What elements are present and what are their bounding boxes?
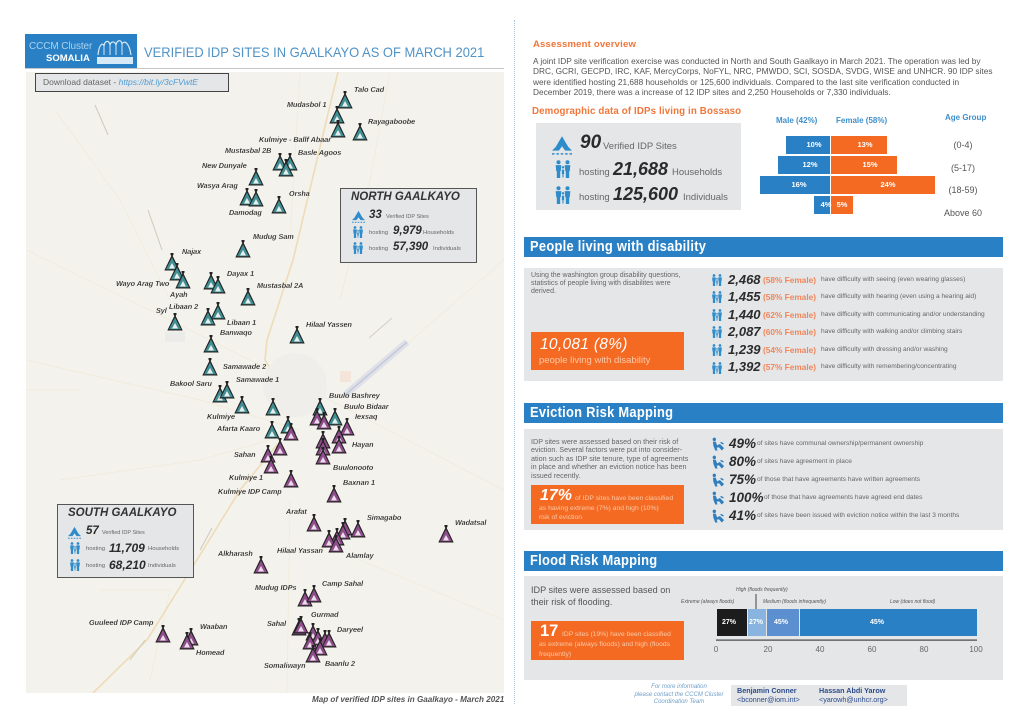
panel: south Gaalkayo: [57, 504, 194, 578]
site name labels: Samawade 2: [223, 362, 266, 371]
disability statistics: [712, 272, 985, 374]
site name labels: Guuleed IDP Camp: [89, 618, 154, 627]
footer: contact note: please contact the CCCM Cluster: [634, 692, 724, 698]
overview text: were identified hosting 21,688 households or 125,600 individuals. Compared to the last site verification conducted in: [533, 77, 959, 87]
panel: south Gaalkayo: Verified IDP Sites: [102, 530, 145, 536]
site name labels: Wasya Arag: [197, 181, 238, 190]
flood risk stacked bar chart: Extreme (always floods): [681, 599, 735, 605]
callout: disability total: people living with disability: [539, 355, 650, 366]
icon: tent: [68, 527, 81, 539]
disability statistics: (62% Female): [763, 310, 816, 320]
eviction intro text: issued recently.: [531, 471, 580, 480]
site name labels: Banwaqo: [220, 328, 253, 337]
site name labels: Afarta Kaaro: [216, 424, 261, 433]
panel: south Gaalkayo: 11,709: [109, 541, 145, 555]
footer: contacts: Hassan Abdi Yarow: [819, 686, 885, 695]
heading: assessment overview: Assessment overview: [533, 39, 636, 50]
eviction statistics: 75%: [729, 472, 756, 487]
section bar: disability: People living with disability: [530, 239, 706, 255]
panel: totals: Households: [672, 167, 722, 178]
eviction intro text: IDP sites were assessed based on their risk of: [531, 437, 678, 446]
site name labels: Buulonooto: [333, 463, 374, 472]
site name labels: Daryeel: [337, 625, 364, 634]
flood risk stacked bar chart: 45%: [870, 619, 885, 626]
footer: contacts: [731, 685, 907, 706]
site name labels: Mudasbol 1: [287, 100, 327, 109]
section bar: flood: Flood Risk Mapping: [530, 553, 657, 569]
panel: north Gaalkayo: 9,979: [393, 225, 422, 237]
site name labels: Mustasbal 2B: [225, 146, 271, 155]
panel: north Gaalkayo: hosting: [369, 246, 388, 252]
eviction statistics: of sites have communal ownership/permanent ownership: [757, 440, 923, 447]
site name labels: Arafat: [285, 507, 307, 516]
icon: people: [70, 542, 80, 554]
site name labels: Alkharash: [217, 549, 253, 558]
site name labels: Syl: [156, 306, 168, 315]
airport and town: [345, 342, 407, 395]
population pyramid chart: (5-17): [951, 163, 975, 173]
panel: flood: [524, 576, 1003, 680]
north site markers: [164, 91, 368, 438]
overview text: December 2019, there was a increase of 12 IDP sites and 2,250 Households or 7,330 individuals.: [533, 87, 891, 97]
overview text: [533, 56, 992, 97]
panel: north Gaalkayo: 33: [369, 209, 382, 221]
footer: contacts: Benjamin Conner: [737, 686, 797, 695]
eviction statistics: [712, 436, 959, 523]
panel: south Gaalkayo: 68,210: [109, 558, 146, 572]
eviction statistics: 100%: [729, 490, 764, 505]
site name labels: Damodag: [229, 208, 262, 217]
eviction statistics: 49%: [729, 436, 756, 451]
callout: eviction: as having extreme (7%) and high (10%): [539, 505, 659, 512]
footer: contact note: For more information: [651, 684, 707, 690]
flood risk stacked bar chart: Low (does not flood): [890, 599, 936, 605]
site name labels: Talo Cad: [354, 85, 385, 94]
section bar: eviction: Eviction Risk Mapping: [530, 405, 673, 421]
callout: eviction: of IDP sites have been classified: [575, 495, 673, 502]
header logo: CCCM Cluster Somalia: [25, 34, 137, 68]
site name labels: Alamlay: [345, 551, 375, 560]
site name labels: Libaan 1: [227, 318, 256, 327]
icon: tent: [352, 211, 365, 223]
site name labels: Dayax 1: [227, 269, 254, 278]
panel: south Gaalkayo: Individuals: [148, 563, 176, 569]
panel: north Gaalkayo: Verified IDP Sites: [386, 214, 429, 220]
site name labels: Rayagaboobe: [368, 117, 415, 126]
panel: north Gaalkayo: 57,390: [393, 241, 428, 253]
header logo: CCCM Cluster Somalia: SOMALIA: [46, 53, 90, 64]
population pyramid chart: Age Group: [945, 113, 986, 122]
callout: eviction: [531, 485, 684, 524]
site name labels: Wayo Arag Two: [116, 279, 170, 288]
flood risk stacked bar chart: High (floods frequently): [736, 587, 788, 593]
map of IDP sites: [26, 72, 504, 693]
site name labels: Libaan 2: [169, 302, 198, 311]
site name labels: Kulmiye - Ballf Abaar: [259, 135, 332, 144]
site name labels: Mudug IDPs: [255, 583, 297, 592]
header logo: CCCM Cluster Somalia: CCCM Cluster: [29, 41, 92, 52]
population pyramid chart: 16%: [791, 180, 807, 189]
site name labels: Homead: [196, 648, 225, 657]
disability statistics: 2,468: [728, 272, 761, 287]
disability statistics: have difficulty with walking and/or climbing stairs: [821, 328, 962, 335]
disability statistics: 1,392: [728, 359, 761, 374]
footer: contact note: Coordination Team: [654, 699, 704, 705]
footer: contact note: [634, 684, 724, 705]
panel: totals: Individuals: [683, 192, 728, 203]
panel: disability: [524, 268, 1003, 381]
panel: north Gaalkayo: NORTH GAALKAYO: [351, 191, 460, 203]
overview text: A joint IDP site verification exercise was conducted in North and South Gaalkayo in March 2021. The operation was led by: [533, 56, 981, 66]
eviction statistics: of those that have agreements have written agreements: [757, 476, 920, 483]
disability statistics: 1,440: [728, 307, 761, 322]
main title: VERIFIED IDP SITES IN GAALKAYO AS OF MARCH 2021: [144, 44, 484, 60]
callout: flood: as extreme (always floods) and high (floods: [539, 641, 670, 648]
site name labels: Wadatsal: [455, 518, 487, 527]
site name labels: New Dunyale: [202, 161, 247, 170]
disability statistics: (60% Female): [763, 327, 816, 337]
site name labels: Waaban: [200, 622, 228, 631]
population pyramid chart: 4%: [821, 200, 832, 209]
icon: people: [353, 226, 363, 238]
main road: [265, 72, 338, 405]
population pyramid chart: 12%: [802, 160, 818, 169]
panel: totals: 21,688: [613, 159, 668, 179]
panel: south Gaalkayo: hosting: [86, 546, 105, 552]
flood risk stacked bar chart: 45%: [774, 619, 789, 626]
site name labels: Kulmiye 1: [229, 473, 263, 482]
disability statistics: have difficulty with dressing and/or washing: [821, 346, 948, 353]
panel: totals: hosting: [579, 167, 610, 178]
panel: south Gaalkayo: hosting: [86, 563, 105, 569]
section bar: flood: [524, 551, 1003, 571]
icon: people: [556, 160, 570, 178]
south site markers: [155, 408, 454, 662]
disability statistics: 1,455: [728, 289, 761, 304]
population pyramid chart: 13%: [857, 140, 873, 149]
panel: north Gaalkayo: Households: [423, 230, 454, 236]
population pyramid chart: Female (58%): [836, 116, 887, 125]
flood risk stacked bar chart: 80: [920, 645, 929, 654]
population pyramid chart: Above 60: [944, 208, 982, 218]
panel: north Gaalkayo: hosting: [369, 230, 388, 236]
panel: north Gaalkayo: [340, 188, 477, 263]
disability intro text: Using the washington group disability questions,: [531, 272, 680, 279]
disability statistics: have difficulty with remembering/concentrating: [821, 363, 956, 370]
flood risk stacked bar chart: 27%: [749, 619, 764, 626]
eviction intro text: ation such as IDP site tenure, type of agreements: [531, 454, 688, 463]
population pyramid chart: [760, 113, 986, 218]
panel: north Gaalkayo: Individuals: [433, 246, 461, 252]
callout: disability total: [531, 332, 684, 370]
flood risk stacked bar chart: 20: [764, 645, 773, 654]
population pyramid chart: 5%: [837, 200, 848, 209]
population pyramid chart: Male (42%): [776, 116, 818, 125]
site name labels: Orsha: [289, 189, 310, 198]
icon: tent: [552, 136, 572, 155]
callout: eviction: 17%: [540, 487, 572, 504]
flood intro text: their risk of flooding.: [531, 596, 612, 606]
site name labels: Camp Sahal: [322, 579, 364, 588]
population pyramid chart: (0-4): [953, 140, 973, 150]
panel: totals: hosting: [579, 192, 610, 203]
eviction statistics: 80%: [729, 454, 756, 469]
site name labels: Simagabo: [367, 513, 402, 522]
site name labels: Buulo Bidaar: [344, 402, 390, 411]
download dataset box: [35, 73, 229, 92]
disability intro text: statistics of people living with disabilites were: [531, 280, 671, 287]
site name labels: Sahal: [267, 619, 287, 628]
site name labels: Gurmad: [311, 610, 339, 619]
section bar: eviction: [524, 403, 1003, 423]
population pyramid chart: (18-59): [948, 185, 978, 195]
site name labels: [89, 85, 487, 670]
disability statistics: (58% Female): [763, 275, 816, 285]
site name labels: Iexsaq: [355, 412, 378, 421]
callout: disability total: 10,081 (8%): [540, 336, 628, 353]
panel: eviction: [524, 429, 1003, 530]
eviction statistics: 41%: [729, 508, 756, 523]
flood intro text: IDP sites were assessed based on: [531, 585, 670, 595]
population pyramid chart: 24%: [880, 180, 896, 189]
site name labels: Hayan: [352, 440, 374, 449]
eviction statistics: of those that have agreements have agreed end dates: [764, 494, 922, 501]
flood risk stacked bar chart: 40: [816, 645, 825, 654]
heading: demographic data: Demographic data of IDPs living in Bossaso: [532, 106, 741, 117]
flood risk stacked bar chart: Medium (floods infrequently): [763, 599, 826, 605]
population pyramid chart: 10%: [806, 140, 822, 149]
site name labels: Sahan: [234, 450, 256, 459]
flood risk stacked bar chart: 0: [714, 645, 719, 654]
disability statistics: (54% Female): [763, 345, 816, 355]
panel: totals: 90: [580, 132, 601, 153]
disability intro text: [531, 272, 680, 295]
disability intro text: derived.: [531, 288, 556, 295]
site name labels: Najax: [182, 247, 202, 256]
site name labels: Hilaal Yassan: [277, 546, 324, 555]
site name labels: Kulmiye: [207, 412, 235, 421]
site name labels: Mustasbal 2A: [257, 281, 303, 290]
panel: south Gaalkayo: SOUTH GAALKAYO: [68, 507, 176, 519]
callout: flood: frequently): [539, 650, 571, 658]
eviction intro text: [531, 437, 688, 480]
panel: south Gaalkayo: Households: [148, 546, 179, 552]
population pyramid chart: 15%: [862, 160, 878, 169]
site name labels: Ayah: [169, 290, 188, 299]
site name labels: Somaliwayn: [264, 661, 306, 670]
site name labels: Baxnan 1: [343, 478, 375, 487]
site name labels: Samawade 1: [236, 375, 279, 384]
eviction statistics: of sites have agreement in place: [757, 458, 852, 465]
section bar: disability: [524, 237, 1003, 257]
site name labels: Mudug Sam: [253, 232, 294, 241]
map caption: Map of verified IDP sites in Gaalkayo - March 2021: [312, 695, 504, 704]
site name labels: Bakool Saru: [170, 379, 213, 388]
callout: flood: 17: [540, 622, 558, 640]
site name labels: Kulmiye IDP Camp: [218, 487, 282, 496]
eviction intro text: in place and whether an eviction notice has been: [531, 462, 686, 471]
site name labels: Buulo Bashrey: [329, 391, 381, 400]
site name labels: Hilaal Yassen: [306, 320, 353, 329]
flood risk stacked bar chart: 60: [868, 645, 877, 654]
download dataset box: Download dataset - https://bit.ly/3cFVwtE: [43, 77, 198, 87]
callout: eviction: risk of eviction: [539, 514, 582, 521]
flood risk stacked bar chart: [681, 587, 983, 654]
disability statistics: 2,087: [728, 324, 761, 339]
disability statistics: have difficulty with seeing (even wearing glasses): [821, 276, 965, 283]
panel: totals: Verified IDP Sites: [603, 141, 677, 152]
site name labels: Baanlu 2: [325, 659, 355, 668]
flood intro text: [531, 585, 670, 607]
disability statistics: (57% Female): [763, 362, 816, 372]
panel: totals: [536, 123, 741, 210]
disability statistics: have difficulty with hearing (even using a hearing aid): [821, 293, 976, 300]
overview text: DRC, GCRI, GECPD, IRC, KAF, MercyCorps, NoFYL, NRC, PMWDO, SCI, SOSDA, SVDG, WISE and UNHCR. 90 IDP sites: [533, 66, 992, 76]
footer: contacts: <bconner@iom.int>: [737, 695, 800, 704]
eviction statistics: of sites have been issued with eviction notice within the last 3 months: [757, 512, 959, 519]
flood risk stacked bar chart: 27%: [722, 619, 737, 626]
disability statistics: (58% Female): [763, 292, 816, 302]
callout: flood: IDP sites (19%) have been classified: [562, 631, 671, 638]
disability statistics: 1,239: [728, 342, 761, 357]
panel: totals: 125,600: [613, 184, 678, 204]
flood risk stacked bar chart: 100: [969, 645, 983, 654]
panel: south Gaalkayo: 57: [86, 525, 99, 537]
callout: flood: [531, 621, 684, 660]
eviction intro text: eviction. Several factors were put into consider-: [531, 445, 682, 454]
disability statistics: have difficulty with communicating and/or understanding: [821, 311, 985, 318]
site name labels: Basle Agoos: [298, 148, 341, 157]
footer: contacts: <yarowh@unhcr.org>: [819, 695, 888, 704]
